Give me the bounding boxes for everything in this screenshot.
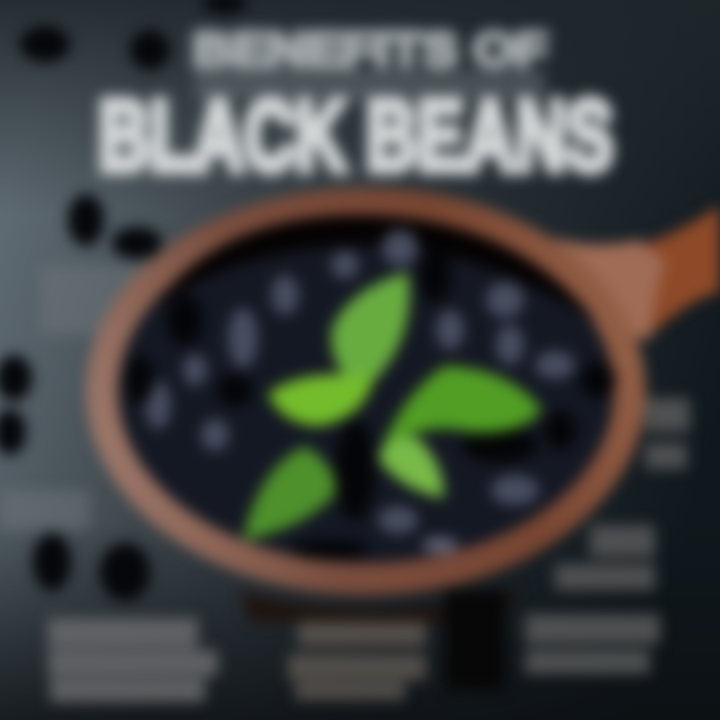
bowl: [103, 204, 629, 578]
bowl interior: black beans: [118, 219, 614, 563]
bowl shadow: [240, 590, 520, 690]
title haze: [195, 70, 545, 100]
benefit block: right middle: [555, 398, 690, 590]
benefit text blocks: [48, 398, 690, 702]
benefit block: bottom right: [525, 614, 660, 674]
benefit block: bottom left: [48, 618, 218, 702]
scattered black beans: [0, 0, 247, 601]
green leaves: [243, 272, 542, 540]
bowl handle: [555, 205, 720, 340]
leaf: centre bottom: [378, 437, 444, 498]
title line: benefits of: BENEFITS OF: [192, 24, 548, 77]
title: [98, 24, 614, 192]
benefit block: bottom centre: [288, 618, 426, 700]
left background haze: [0, 265, 145, 530]
leaf: top: [331, 272, 410, 392]
leaf: bottom left: [243, 446, 336, 540]
bowl rim: [103, 204, 629, 578]
interior shadow: [150, 215, 595, 320]
leaf: left: [268, 374, 374, 426]
leaf: right: [382, 366, 542, 448]
